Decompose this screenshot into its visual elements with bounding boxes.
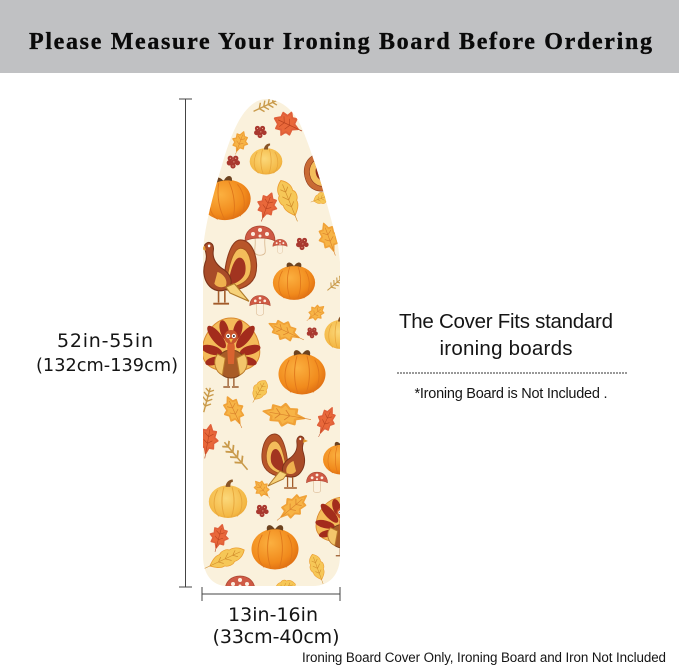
icon: orange pumpkin large <box>278 350 326 394</box>
icon: side turkey upper <box>200 240 257 304</box>
icon: orange leaf right edge <box>318 222 338 256</box>
width label: (33cm-40cm) <box>212 626 340 648</box>
icon: red leaf lower <box>206 522 231 554</box>
width label: 13in-16in <box>228 604 318 626</box>
icon: small leaf clipped right <box>310 192 326 204</box>
icon: oak leaf <box>271 489 312 528</box>
width dimension line <box>202 587 340 601</box>
icon: red leaf <box>316 407 336 437</box>
not included note: *Ironing Board is Not Included . <box>414 386 608 402</box>
width label <box>212 604 340 648</box>
ironing board cover with autumn pattern <box>203 99 340 586</box>
icon: orange pumpkin <box>273 263 315 300</box>
icon: mushroom bottom clipped <box>225 576 255 605</box>
icon: berries <box>227 156 240 169</box>
icon: oak leaf wide <box>262 402 311 427</box>
icon: yellow oak leaf <box>201 543 248 576</box>
title: Please Measure Your Ironing Board Before Ordering <box>29 29 652 55</box>
icon: berries <box>256 505 269 517</box>
icon: yellow leaf small <box>252 380 268 402</box>
fit note: The Cover Fits standard <box>399 310 613 333</box>
fit note <box>399 310 613 360</box>
board fabric <box>203 99 340 586</box>
icon: yellow leaf lower right <box>306 552 330 586</box>
icon: orange pumpkin bottom <box>251 525 299 569</box>
icon: side turkey lower <box>262 434 308 488</box>
icon: orange leaf upper left <box>232 131 248 154</box>
icon: oak leaf <box>268 320 304 342</box>
icon: small leaf <box>254 480 270 498</box>
icon: small mushroom <box>273 239 287 253</box>
icon: clipped front turkey right <box>314 497 372 556</box>
header banner <box>0 0 679 73</box>
icon: frond top <box>253 99 278 112</box>
icon: yellow pumpkin <box>209 480 247 518</box>
icon: yellow pumpkin clipped right <box>324 316 340 349</box>
height dimension line <box>179 99 192 587</box>
icon: yellow pumpkin <box>250 144 282 175</box>
icon: small leaf <box>306 304 324 321</box>
icon: orange leaf <box>223 396 244 428</box>
fit note: ironing boards <box>440 337 572 360</box>
icon: berries <box>296 238 309 250</box>
height label: 52in-55in <box>57 330 153 352</box>
icon: frond right <box>327 276 340 291</box>
icon: frond diagonal <box>222 440 248 470</box>
icon: berries <box>254 126 267 138</box>
icon: berries <box>307 328 318 338</box>
icon: red leaf top <box>274 112 302 136</box>
height label: (132cm-139cm) <box>36 356 178 376</box>
footer disclaimer: Ironing Board Cover Only, Ironing Board and Iron Not Included <box>302 650 666 665</box>
icon: frond left <box>203 388 214 412</box>
icon: front turkey <box>200 318 262 387</box>
icon: yellow leaf <box>277 180 298 222</box>
icon: big mushroom <box>245 226 275 255</box>
height label <box>36 330 178 376</box>
icon: mushroom right <box>306 472 328 493</box>
icon: small mushroom <box>250 295 270 315</box>
icon: orange pumpkin clipped right <box>323 442 340 474</box>
icon: orange pumpkin clipped left <box>208 176 251 220</box>
icon: leaf bottom clipped <box>269 577 297 597</box>
icon: red leaf left <box>203 424 219 458</box>
dotted divider <box>397 372 627 374</box>
icon: clipped turkey top right <box>304 156 324 192</box>
icon: red leaf <box>257 192 278 222</box>
